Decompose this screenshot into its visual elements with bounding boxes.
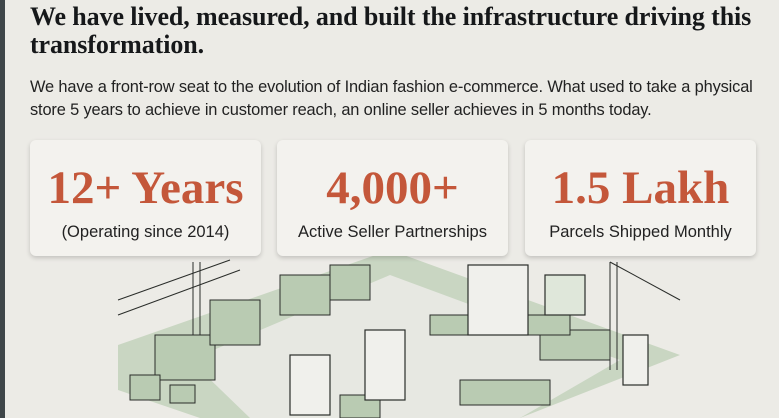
intro paragraph: We have a front-row seat to the evolution of Indian fashion e-commerce. What used to take a physical xyxy=(30,78,753,96)
title xyxy=(30,2,751,59)
card: sellers: Active Seller Partnerships xyxy=(298,223,487,241)
card: sellers: 4,000+ xyxy=(326,162,459,214)
intro paragraph: store 5 years to achieve in customer reach, an online seller achieves in 5 months today. xyxy=(30,101,652,119)
intro paragraph xyxy=(30,78,753,119)
card: parcels: 1.5 Lakh xyxy=(552,162,729,214)
title: We have lived, measured, and built the infrastructure driving this xyxy=(30,2,751,31)
card: parcels: Parcels Shipped Monthly xyxy=(549,223,732,241)
card: sellers xyxy=(277,140,508,256)
card: years: (Operating since 2014) xyxy=(62,223,229,241)
card: years: 12+ Years xyxy=(47,162,244,214)
card: parcels xyxy=(525,140,756,256)
title: transformation. xyxy=(30,30,204,59)
card: years xyxy=(30,140,261,256)
